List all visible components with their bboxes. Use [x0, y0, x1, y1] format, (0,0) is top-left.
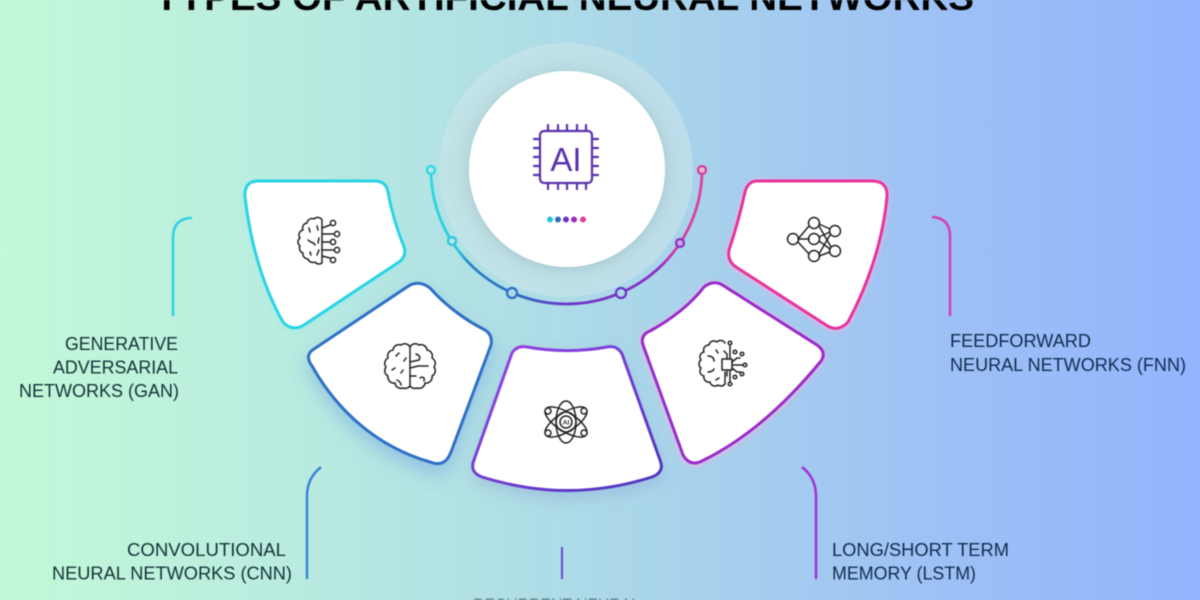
hub white circle	[469, 71, 665, 267]
icon: AI chip	[534, 125, 598, 189]
label: GAN: NETWORKS (GAN)	[19, 381, 179, 401]
label: FNN: NEURAL NETWORKS (FNN)	[950, 355, 1186, 375]
connector arc with nodes	[427, 166, 706, 304]
label: LSTM	[802, 467, 1009, 584]
icon: brain with chip	[699, 340, 747, 386]
icon: neural network	[788, 218, 840, 262]
icon: AI chip: AI	[550, 141, 582, 178]
icon: brain	[385, 344, 435, 388]
label: LSTM: MEMORY (LSTM)	[832, 564, 976, 584]
icon: half brain with circuits	[298, 217, 340, 264]
label: FNN: FEEDFORWARD	[950, 331, 1091, 351]
panel: LSTM card	[642, 283, 823, 463]
panel: CNN card	[308, 283, 491, 464]
hub halo	[439, 43, 693, 297]
panel: RNN card	[473, 347, 661, 490]
label: CNN: CONVOLUTIONAL	[127, 540, 286, 560]
icon: AI atom	[541, 401, 591, 443]
colored dots	[547, 216, 586, 222]
label: FNN	[932, 217, 1186, 375]
label: GAN	[19, 218, 192, 401]
icon: AI atom: AI	[563, 420, 569, 426]
label: GAN: ADVERSARIAL	[53, 358, 178, 378]
label: CNN: NEURAL NETWORKS (CNN)	[52, 564, 292, 584]
panel: FNN card	[729, 181, 887, 328]
central AI hub	[439, 43, 693, 297]
label: CNN	[52, 467, 321, 584]
panel: GAN card	[245, 181, 405, 328]
label: GAN: GENERATIVE	[65, 334, 178, 354]
label: LSTM: LONG/SHORT TERM	[832, 540, 1009, 560]
